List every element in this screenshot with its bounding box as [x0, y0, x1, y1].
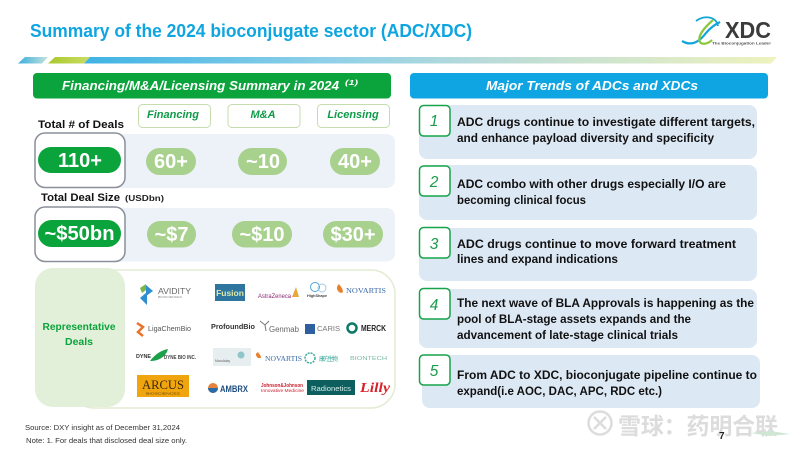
trend card 2: ADC combo with other drugs especially I/O are — [457, 177, 726, 191]
pill: 40+: 40+ — [338, 151, 372, 173]
source note: Source: DXY insight as of December 31,2024 — [25, 425, 180, 432]
logo: XDC — [682, 17, 772, 46]
trend card 5: From ADC to XDC, bioconjugate pipeline continue to — [457, 368, 757, 382]
logo: FighShape: HighShape — [307, 294, 327, 298]
pill: ~$50bn — [38, 220, 121, 247]
pill: 60+: 60+ — [154, 151, 188, 173]
panel: financing summary — [33, 73, 395, 408]
logo: Merck: MERCK — [361, 324, 386, 333]
pill: 40+ — [330, 148, 380, 175]
pill: ~$7: ~$7 — [155, 224, 188, 246]
trend card 5 — [420, 355, 760, 408]
logo: LigaChemBio — [137, 323, 191, 336]
row: number of deals — [35, 133, 395, 188]
logo: Novartis top: NOVARTIS — [346, 287, 386, 295]
logo: Merck — [348, 324, 386, 333]
tab: M&A: M&A — [250, 109, 276, 121]
logo: Radionetics: Radionetics — [311, 386, 352, 393]
logo: Novartis top — [337, 284, 386, 295]
trend card 2: becoming clinical focus — [457, 193, 586, 207]
page number: 7 — [719, 431, 725, 442]
tab: Licensing: Licensing — [327, 109, 379, 121]
logo: Avidity: BIOSCIENCES — [158, 296, 182, 299]
logo: Mandalay — [213, 348, 251, 366]
logo: Arcus: BIOSCIENCES — [146, 392, 180, 396]
trend card 5: expand(i.e AOC, DAC, APC, RDC etc.) — [457, 384, 662, 398]
logo: Lilly: Lilly — [359, 381, 391, 396]
logo: Ambrx — [208, 383, 248, 394]
label: total deal size: Total Deal Size — [41, 192, 120, 204]
logo: Mandalay: Mandalay — [215, 359, 230, 363]
logo: Avidity — [140, 284, 192, 305]
trend card 1 — [419, 105, 757, 159]
logo: Johnson & Johnson: Johnson&Johnson — [261, 383, 303, 389]
tab: Financing: Financing — [147, 109, 199, 121]
logo: Dyne: DYNE — [136, 354, 152, 360]
logo: Dyne: DYNE BIO INC. — [164, 355, 197, 361]
footer mark — [750, 431, 790, 436]
heading: major trends: Major Trends of ADCs and XDCs — [486, 78, 698, 93]
logo: ProfoundBio: ProfoundBio — [211, 322, 255, 331]
panel: representative deals — [35, 268, 395, 408]
logo: Genmab: Genmab — [269, 325, 300, 334]
header gradient bar — [18, 57, 777, 64]
logo: Caris: CARIS — [317, 326, 340, 333]
label: total deal size: (USDbn) — [125, 194, 164, 203]
trend card 4: pool of BLA-stage assets expands and the — [457, 312, 691, 326]
label: representative deals: Deals — [65, 336, 93, 348]
logo: BioNTech: BIONTECH — [350, 356, 387, 362]
logo: XDC: The Bioconjugation Leader — [712, 40, 772, 46]
heading: financing summary: (1) — [345, 80, 359, 87]
label: representative deals: Representative — [42, 321, 116, 333]
trend card 4: The next wave of BLA Approvals is happening as the — [457, 296, 754, 310]
logo: AstraZeneca — [258, 287, 299, 300]
logo: Avidity: AVIDITY — [158, 287, 192, 296]
logo: Chinese biotech — [305, 353, 338, 363]
logo: Novartis middle — [256, 352, 302, 363]
pill: ~$10: ~$10 — [239, 224, 285, 246]
label: representative deals — [42, 321, 116, 348]
company logos — [136, 282, 391, 397]
pill: ~$50bn: ~$50bn — [44, 223, 114, 245]
label: total deals: Total # of Deals — [38, 119, 124, 131]
pill: 60+ — [146, 148, 196, 175]
trend card 5: 5 — [430, 363, 439, 380]
logo: Johnson & Johnson — [261, 383, 304, 394]
trend card 1: ADC drugs continue to investigate different targets, — [457, 115, 755, 129]
pill: 110+: 110+ — [58, 150, 102, 172]
footnote: Note: 1. For deals that disclosed deal size only. — [26, 438, 187, 445]
logo: Chinese biotech: 康方生物 — [319, 354, 338, 363]
logo: FighShape — [307, 282, 327, 298]
logo: Radionetics — [307, 380, 355, 395]
trend card 1: and enhance payload diversity and specificity — [457, 131, 714, 145]
logo: Ambrx: AMBRX — [220, 384, 248, 394]
row: deal size — [35, 207, 395, 262]
logo: XDC: XDC — [725, 17, 771, 43]
pill: ~10: ~10 — [246, 151, 280, 173]
logo: Arcus: ARCUS — [142, 377, 184, 392]
trend card 4: 4 — [430, 297, 439, 314]
trend card 4 — [419, 288, 757, 348]
heading: financing summary: Financing/M&A/Licensing Summary in 2024 — [62, 78, 340, 93]
logo: LigaChemBio: LigaChemBio — [148, 324, 191, 333]
trend card 4: advancement of late-stage clinical trials — [457, 328, 678, 342]
heading: financing summary — [33, 73, 391, 98]
pill: 110+ — [38, 147, 121, 173]
trend card 3: lines and expand indications — [457, 252, 618, 266]
pill: $30+: $30+ — [330, 224, 376, 246]
heading: major trends — [410, 73, 768, 98]
panel: major trends — [410, 73, 768, 408]
logo: Fusion: Fusion — [216, 288, 244, 298]
tab: M&A — [228, 104, 300, 128]
logo: Caris — [305, 324, 340, 334]
trend card 2 — [419, 165, 757, 220]
trend card 3: 3 — [430, 236, 439, 253]
logo: Arcus — [137, 375, 189, 397]
pill: ~$10 — [232, 221, 292, 248]
trend card 3: ADC drugs continue to move forward treatment — [457, 237, 736, 251]
logo: Dyne — [136, 349, 197, 361]
label: total deal size — [41, 192, 164, 204]
watermark: 雪球：药明合联 — [618, 413, 778, 439]
trend card 2: 2 — [429, 174, 439, 191]
title: Summary of the 2024 bioconjugate sector (ADC/XDC) — [30, 21, 472, 41]
trend card 3 — [419, 228, 757, 281]
trend card 1: 1 — [430, 113, 438, 130]
pill: ~$7 — [147, 221, 196, 248]
tab: Financing — [138, 104, 210, 128]
pill: $30+ — [323, 221, 383, 248]
tab: Licensing — [318, 104, 390, 128]
logo: Johnson & Johnson: Innovative Medicine — [261, 388, 304, 394]
logo: Novartis middle: NOVARTIS — [265, 355, 302, 363]
logo: AstraZeneca: AstraZeneca — [258, 293, 291, 300]
pill: ~10 — [238, 148, 287, 175]
logo: Genmab — [260, 321, 300, 334]
logo: Fusion — [215, 284, 245, 301]
